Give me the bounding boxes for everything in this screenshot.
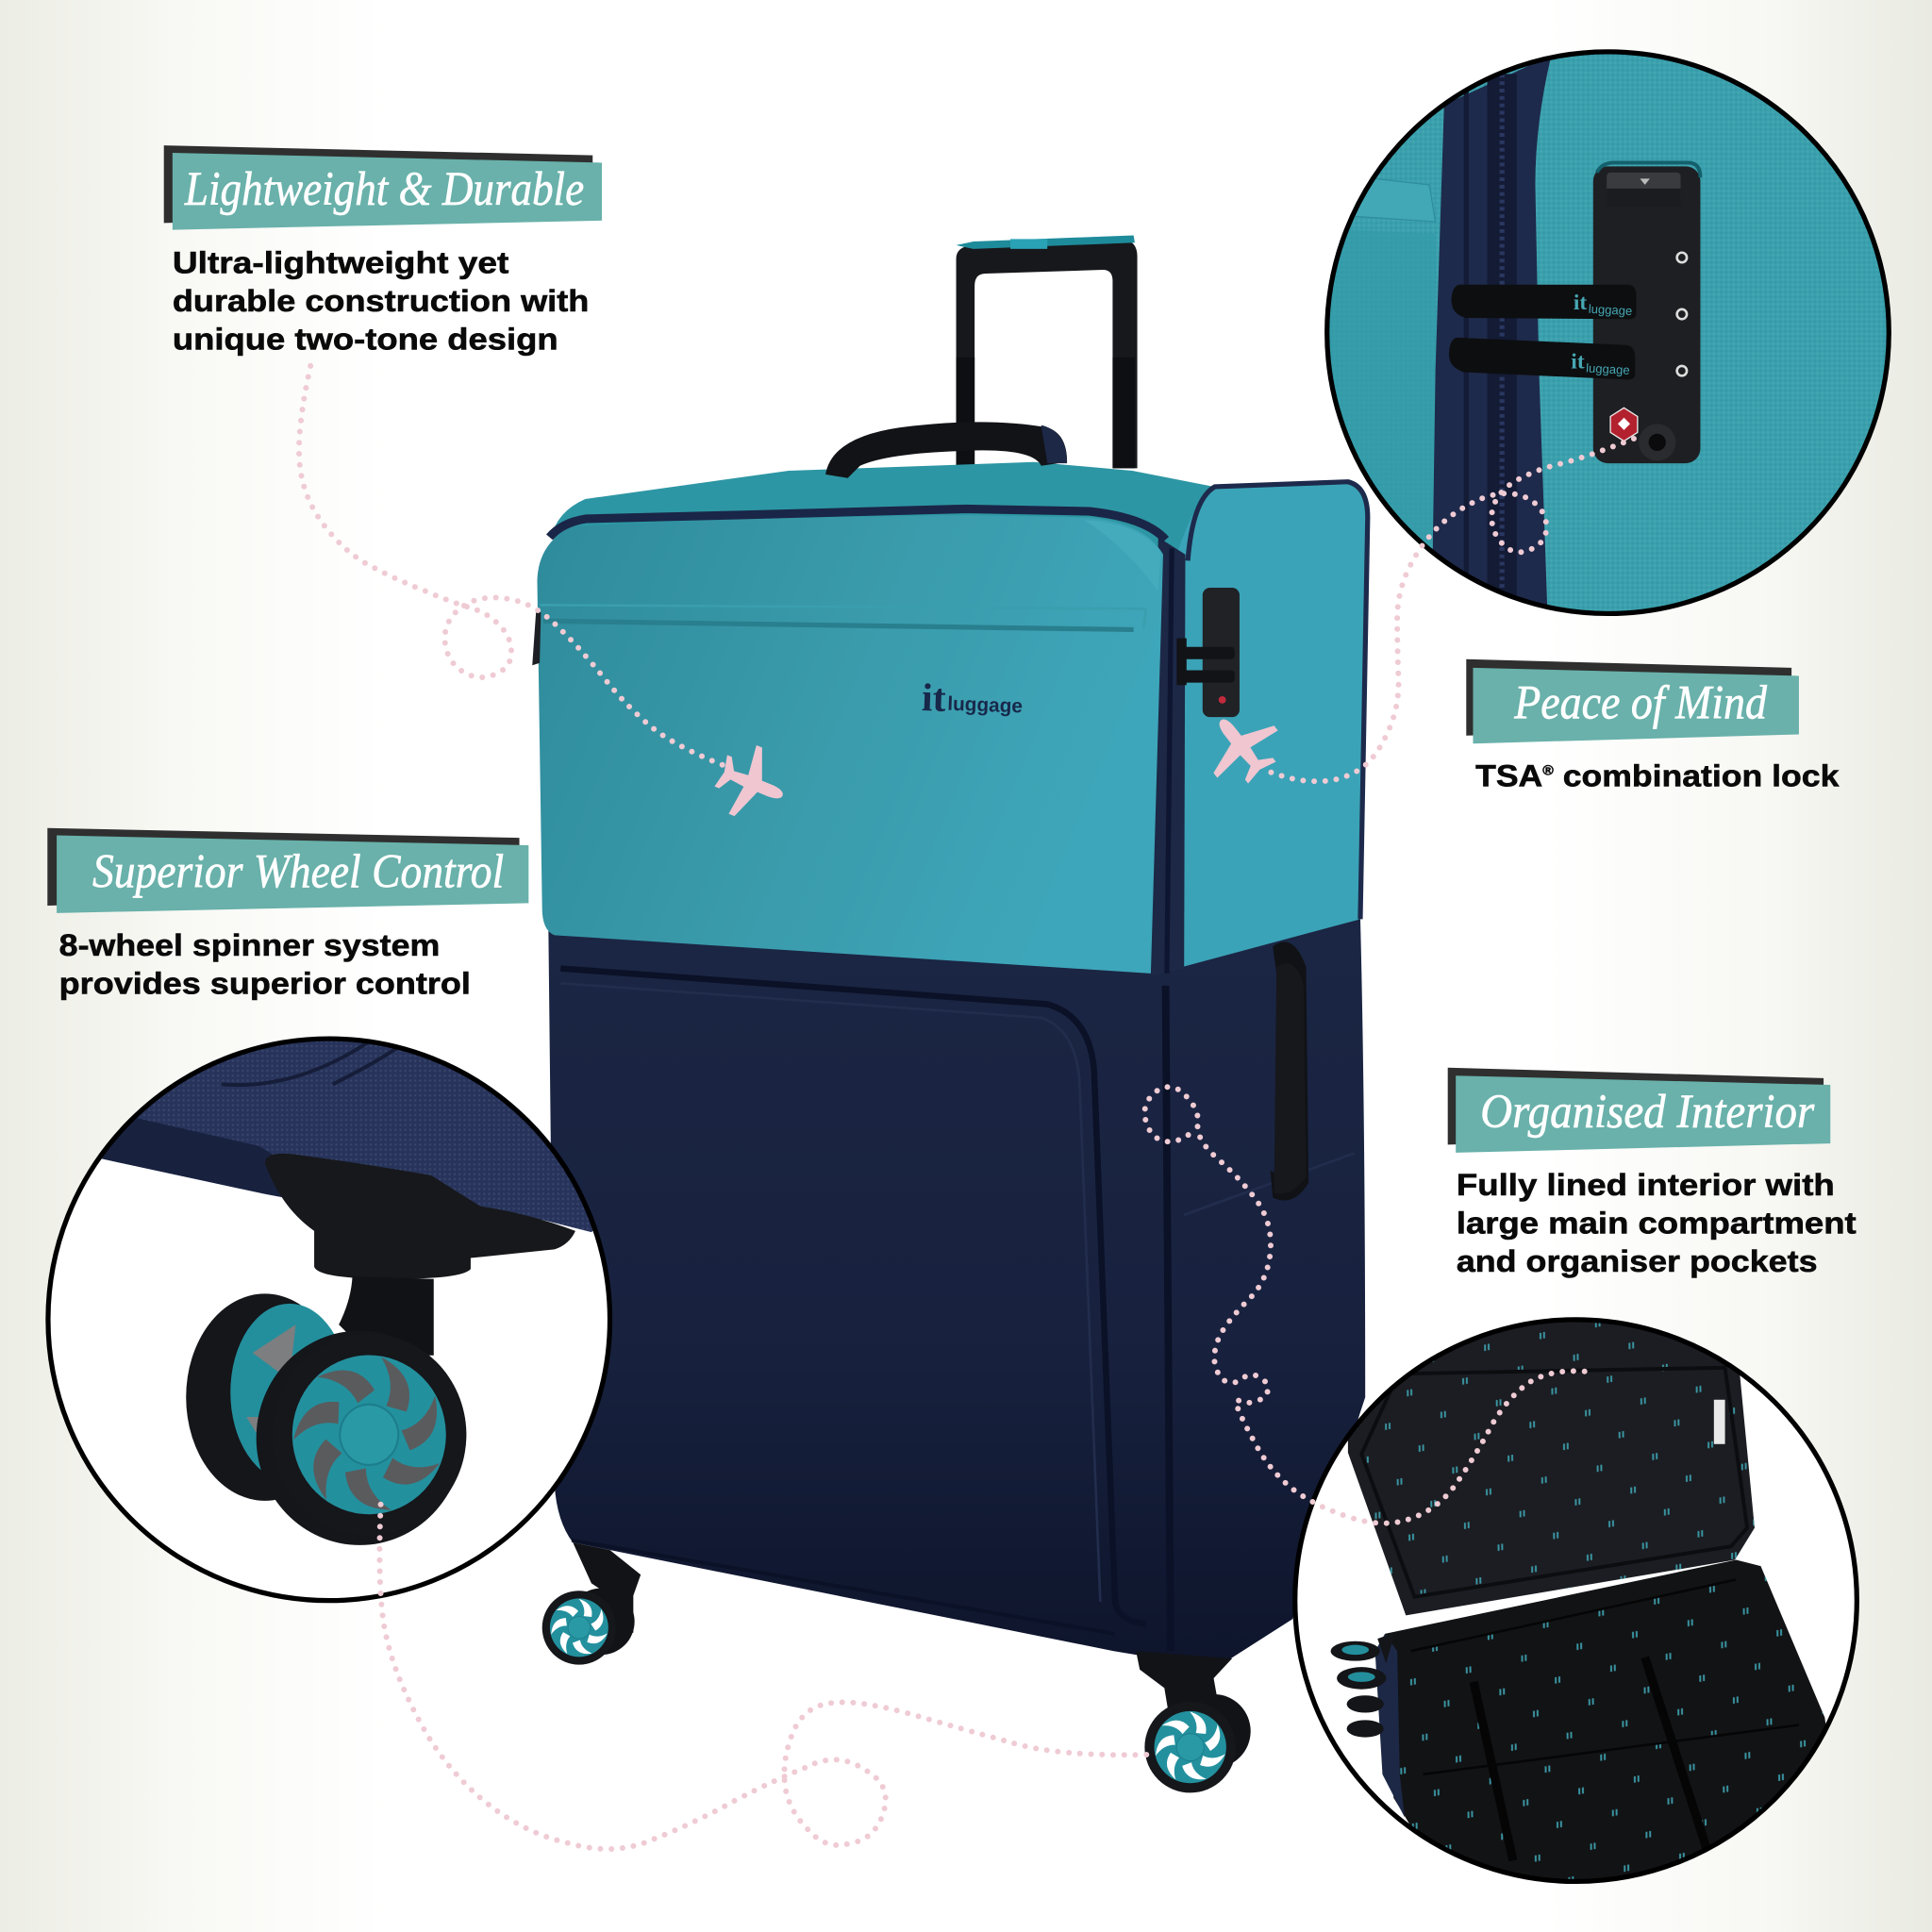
dotted route: wheels xyxy=(379,1505,1151,1849)
open lid xyxy=(1348,1306,1755,1615)
zip band xyxy=(1432,56,1551,616)
combination lock xyxy=(1593,162,1700,463)
front teal panel xyxy=(537,515,1163,974)
swivel mount xyxy=(265,1154,575,1279)
label banner xyxy=(1466,659,1799,743)
side carry handle xyxy=(1271,942,1308,1201)
side wheels xyxy=(1331,1633,1395,1738)
top teal surface xyxy=(551,462,1214,560)
description: provides superior control xyxy=(59,965,471,1000)
description: Ultra-lightweight yet xyxy=(173,244,509,279)
callout: superior wheel control xyxy=(47,828,528,1000)
inset: lock detail xyxy=(1319,44,1897,624)
dotted route: lightweight xyxy=(299,366,729,768)
lower navy body xyxy=(548,918,1365,1658)
callout: peace of mind xyxy=(1466,659,1840,792)
label banner: Lightweight & Durable xyxy=(184,163,584,216)
description: large main compartment xyxy=(1457,1205,1857,1240)
description: TSA xyxy=(1475,758,1537,792)
callout: lightweight and durable xyxy=(164,145,602,356)
zip band between panels xyxy=(1151,537,1185,975)
wheel inset ring xyxy=(48,1039,610,1601)
description: Fully lined interior with xyxy=(1457,1167,1835,1202)
interior inset ring xyxy=(1295,1320,1857,1881)
brand logo: luggage xyxy=(947,693,1023,717)
description xyxy=(173,244,589,356)
main zip xyxy=(550,508,1166,540)
icon: plane on side panel xyxy=(1191,696,1292,796)
open base xyxy=(1375,1560,1848,1897)
label banner xyxy=(1448,1068,1830,1153)
label banner: Peace of Mind xyxy=(1513,676,1767,729)
inset: interior detail xyxy=(1291,1306,1860,1897)
description: combination lock xyxy=(1554,758,1840,792)
description: ® xyxy=(1542,764,1554,779)
lock straps: luggage xyxy=(1586,360,1630,377)
label banner xyxy=(47,828,528,913)
front pocket zip xyxy=(532,605,1146,665)
fabric fold xyxy=(1355,178,1436,223)
brand logo xyxy=(921,676,1024,724)
brand logo: it xyxy=(921,676,946,721)
suitcase xyxy=(532,235,1368,1792)
back wheel xyxy=(186,1293,349,1501)
description: durable construction with xyxy=(173,283,589,318)
lock straps: it xyxy=(1571,350,1585,375)
telescopic handle xyxy=(957,235,1138,468)
front wheel xyxy=(257,1332,466,1545)
dotted route: interior xyxy=(1144,1087,1585,1524)
lock straps xyxy=(1449,285,1637,380)
side piping xyxy=(1188,482,1368,919)
dotted route: lock xyxy=(1261,439,1634,781)
lower seam xyxy=(1166,986,1171,1651)
callout: organised interior xyxy=(1448,1068,1857,1278)
lock straps: luggage xyxy=(1588,302,1633,318)
swivel stem xyxy=(339,1276,434,1356)
description: and organiser pockets xyxy=(1457,1243,1818,1278)
front top highlight xyxy=(1084,520,1160,591)
small lock xyxy=(1176,588,1240,717)
label banner: Organised Interior xyxy=(1480,1086,1814,1139)
front-right wheel xyxy=(1136,1651,1251,1792)
front-left wheel xyxy=(542,1542,641,1665)
label banner: Superior Wheel Control xyxy=(92,845,504,898)
carry handle xyxy=(825,422,1067,478)
description xyxy=(1457,1167,1857,1278)
description xyxy=(59,927,471,1000)
lock inset ring xyxy=(1327,52,1889,613)
side teal face xyxy=(1176,482,1368,969)
description: 8-wheel spinner system xyxy=(59,927,440,962)
description: unique two-tone design xyxy=(173,321,558,356)
lock straps: it xyxy=(1574,291,1587,315)
label banner xyxy=(164,145,602,230)
inset: wheel detail xyxy=(44,1023,616,1605)
icon: plane on front panel xyxy=(707,737,796,830)
navy fabric xyxy=(102,1041,592,1232)
lower pocket zip xyxy=(560,969,1146,1624)
